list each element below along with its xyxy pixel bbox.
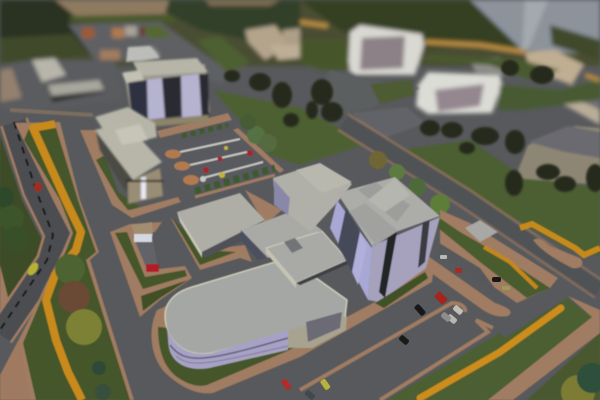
item: upper right buildings xyxy=(245,25,600,125)
item: bottom corner lawn xyxy=(527,333,600,400)
item: left hall curb xyxy=(170,190,282,270)
building: middle hall xyxy=(241,210,322,260)
item: right corner hedge xyxy=(520,224,600,255)
item: parking lot xyxy=(150,113,284,197)
item: orange hedge left xyxy=(33,124,82,400)
item: foreground cars xyxy=(281,255,510,400)
item: gazebo road gap xyxy=(428,236,500,295)
item: tan median curbs xyxy=(300,303,493,400)
item: central small plaza xyxy=(110,222,192,317)
building: left tower xyxy=(122,46,210,128)
item: road through right side xyxy=(343,122,600,290)
item: small gazebo xyxy=(465,220,498,242)
item: trees mid and far xyxy=(224,60,600,196)
building: rounded front hall xyxy=(165,258,347,369)
item: distant cars in parking xyxy=(82,26,160,62)
item: curb beside left block xyxy=(80,130,181,218)
building: entrance block roof xyxy=(266,231,348,288)
building: rear upper block xyxy=(273,163,352,232)
item: tan plaza and curb around hall xyxy=(151,262,434,393)
lawns mid ground xyxy=(213,70,600,290)
item: small car red left xyxy=(34,182,42,192)
item: tan line upper road xyxy=(10,108,93,117)
item: curved roof building right xyxy=(515,126,600,185)
item: shed buildings top-left xyxy=(0,58,104,102)
building: main office tower xyxy=(330,177,440,308)
item: orange hedge bottom xyxy=(420,308,561,398)
item: orange hedges upper right xyxy=(300,22,600,80)
item: median hedge xyxy=(484,247,537,288)
item: green median xyxy=(15,122,134,400)
item: left road xyxy=(0,122,58,335)
item: left lawn xyxy=(0,135,42,310)
item: bottom right trees xyxy=(561,363,600,400)
item: bottom median lawn xyxy=(387,298,592,400)
item: trees left xyxy=(0,187,111,400)
item: tan path bottom-left xyxy=(0,284,62,400)
building: left lower block xyxy=(95,107,163,204)
item: green lawns upper right xyxy=(300,40,600,110)
item: right green median xyxy=(440,210,558,303)
item: tan strip right xyxy=(420,256,511,317)
item: trees beside parking xyxy=(240,114,450,214)
distant landscape xyxy=(0,0,600,125)
item: small car yellow left xyxy=(26,261,40,277)
building: low left hall xyxy=(177,193,265,258)
item: road island xyxy=(533,239,582,268)
